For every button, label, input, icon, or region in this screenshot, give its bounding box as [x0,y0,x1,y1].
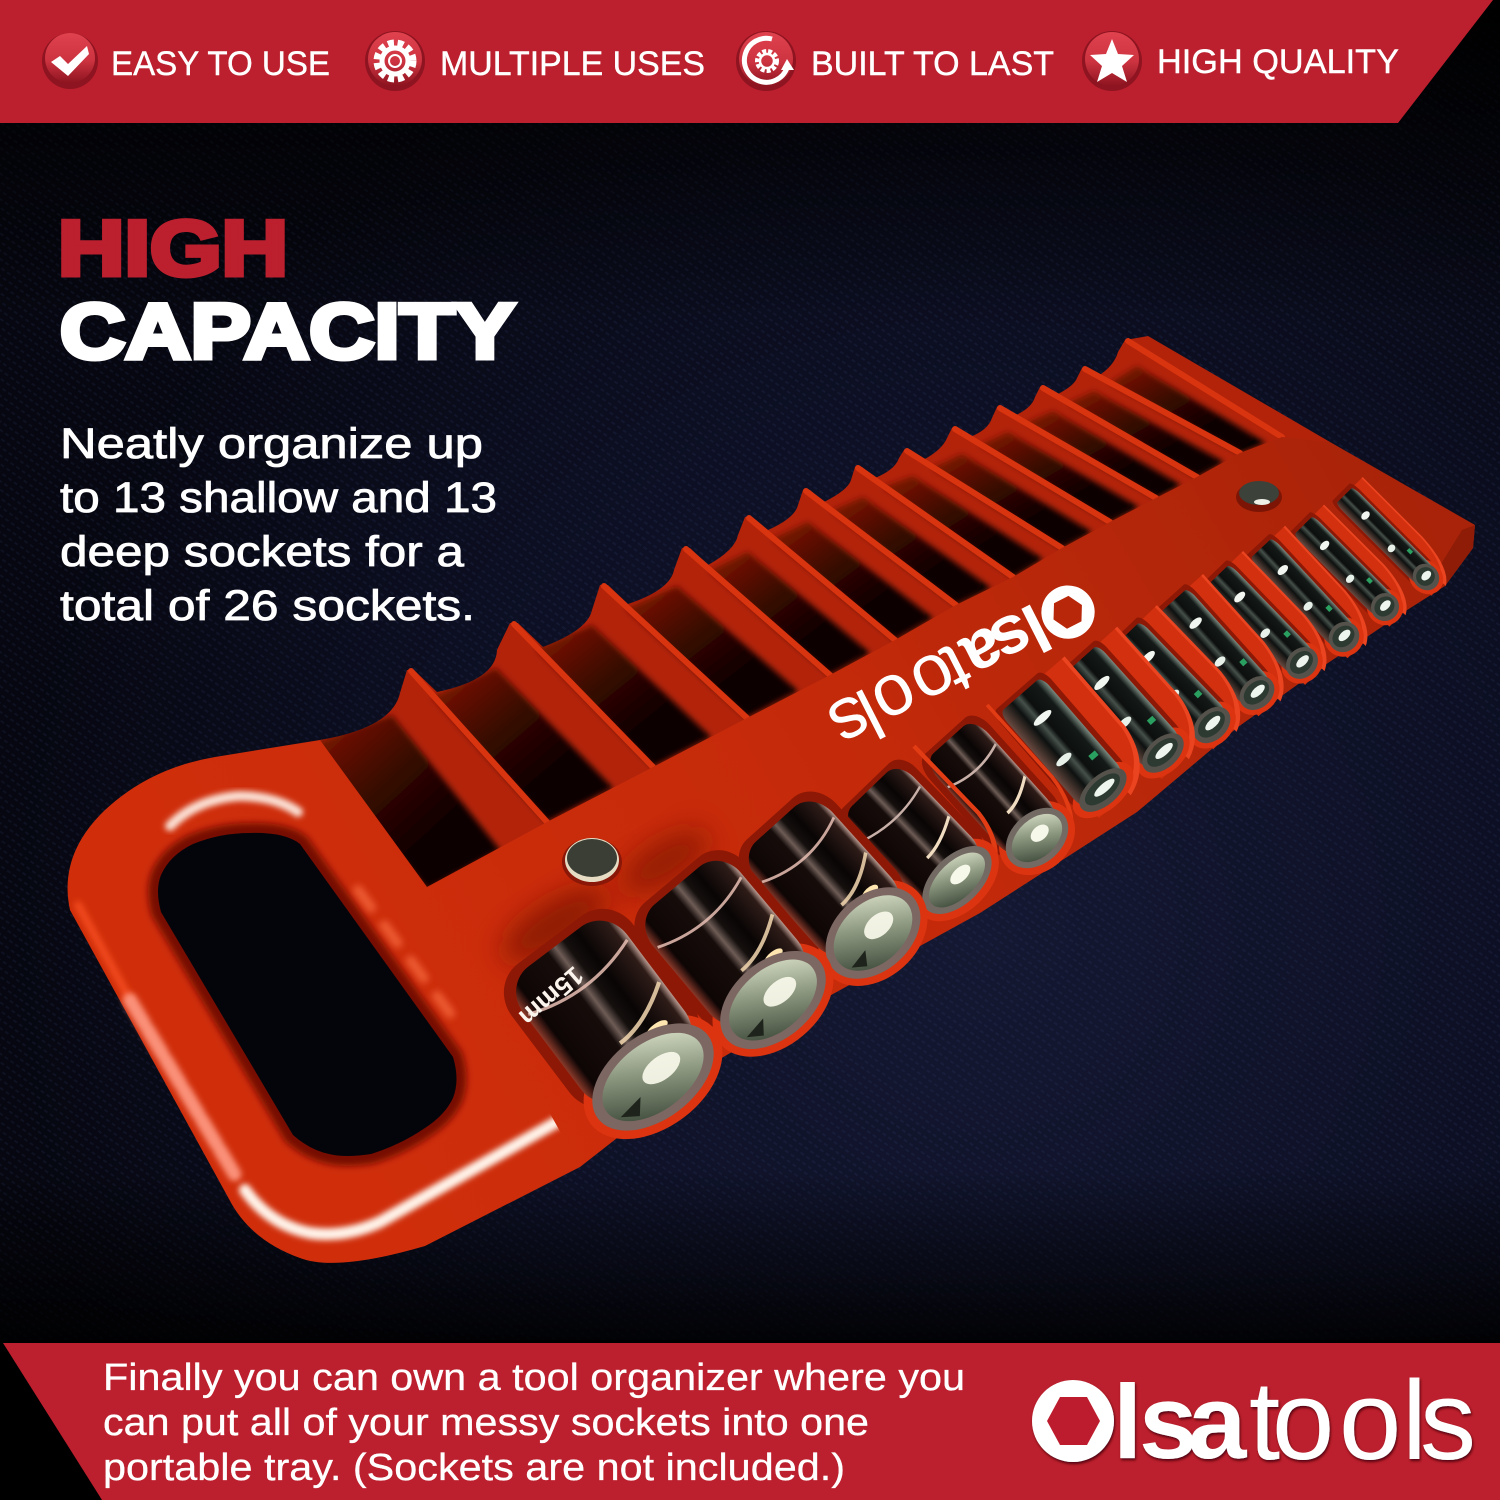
front strap [427,437,1475,1167]
badge: multiple uses [365,31,705,91]
icon: star [1082,31,1142,91]
sockets row [487,474,1457,1165]
tray fins and slots [310,336,1330,900]
label: MULTIPLE USES [440,45,705,83]
badge: built to last [736,31,1054,91]
bottom description [103,1357,965,1489]
icon: check mark [42,33,98,89]
badge: high quality [1082,31,1399,91]
bottom description: can put all of your messy sockets into one [103,1402,869,1444]
heading: HIGH [58,204,288,292]
bottom description: portable tray. (Sockets are not included.) [103,1447,845,1489]
strap logo: Olsa [949,565,1110,697]
rivet far end [1236,481,1282,512]
body text: Neatly organize up [60,420,483,468]
icon: gear [365,31,425,91]
label: BUILT TO LAST [811,45,1054,83]
body text [60,420,497,630]
rivet near handle [562,838,622,886]
handle opening [158,833,456,1156]
carrying handle [68,740,640,1263]
heading: CAPACITY [60,287,515,375]
brand logo: tools [1249,1358,1476,1483]
bottom banner [3,1343,1500,1500]
body text: deep sockets for a [60,528,464,576]
heading [58,204,515,375]
body text: to 13 shallow and 13 [60,474,497,522]
top banner [0,0,1493,123]
body text: total of 26 sockets. [60,582,475,630]
socket size marking: 15mm [513,960,590,1032]
label: HIGH QUALITY [1157,43,1399,81]
handle highlights [78,796,578,1234]
strap logo [816,563,1111,767]
brand logo: Olsa [1030,1364,1248,1481]
product photo: socket tray [68,336,1475,1263]
brand logo [1030,1358,1476,1483]
icon: gear with cycle arrow [736,31,796,91]
badge: easy to use [42,33,330,89]
label: EASY TO USE [111,45,330,83]
bottom description: Finally you can own a tool organizer where you [103,1357,965,1399]
strap logo: tools [816,628,984,767]
